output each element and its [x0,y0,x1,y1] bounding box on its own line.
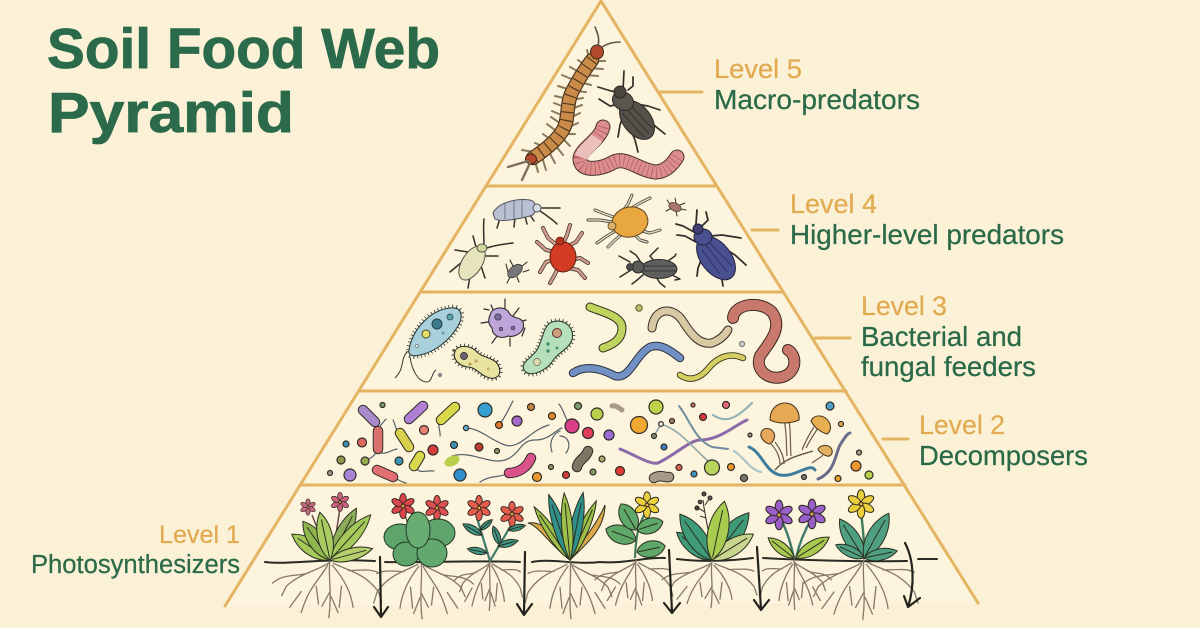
label: level 1: Level 1 [159,521,240,549]
rod bacteria [363,406,669,478]
blue beetle [676,210,746,287]
beetle [598,71,665,152]
label: level 1: Photosynthesizers [31,551,240,579]
label: level 2 [919,410,1088,471]
title [47,17,440,144]
plant 4 [528,491,605,563]
label: level 5 [714,54,920,115]
downward arrows [374,543,920,617]
label: level 3 [861,291,1036,382]
flagella and hyphae [362,401,850,483]
title: Soil Food Web [47,17,440,80]
plant 8 [833,490,898,564]
label: level 2: Level 2 [919,410,1005,440]
orange mite [588,195,660,247]
panel: level 5 macro-predators [508,27,677,180]
coloured microbes [328,400,873,482]
tan nematode [652,311,745,347]
green protozoan [523,321,573,374]
label: level 3: fungal feeders [861,351,1036,382]
label: level 3: Bacterial and [861,321,1022,352]
label: level 3: Level 3 [861,291,947,321]
olive nematode [680,355,743,379]
plant 3 [461,495,526,561]
plant 2 [384,493,455,567]
purple amoeba [481,299,526,346]
soil line [265,558,937,563]
panel: level 2 decomposers [328,400,873,483]
plant 5 [603,492,667,560]
plant 1 [288,492,376,566]
panel: level 3 bacterial and fungal feeders [395,299,794,382]
springtail [493,200,560,228]
yellow peanut protozoan [454,346,500,378]
label: level 2: Decomposers [919,440,1088,471]
label: level 4 [790,189,1064,250]
pale bug [450,219,513,288]
label: level 4: Level 4 [790,189,877,219]
tiny brown bug [666,198,686,216]
label: level 5: Macro-predators [714,84,920,115]
label: level 1 [31,521,240,579]
earthworm [580,127,677,172]
centipede [508,27,620,180]
small grey bug [505,260,529,283]
lime nematode [590,305,642,348]
plant 7 [764,499,833,564]
label: level 4: Higher-level predators [790,219,1064,250]
roots [272,559,918,620]
red mite [537,225,588,283]
title: Pyramid [48,81,294,144]
blue protozoan [395,308,461,382]
panel: level 1 photosynthesizers [265,490,937,620]
panel: level 4 higher-level predators [450,195,746,288]
blue nematode [573,346,680,376]
mushrooms [761,403,832,470]
plant 6 [672,492,758,567]
grey ground beetle [619,248,680,287]
label: level 5: Level 5 [714,54,802,84]
red worm [733,305,794,378]
pyramid outline [205,1,1000,628]
